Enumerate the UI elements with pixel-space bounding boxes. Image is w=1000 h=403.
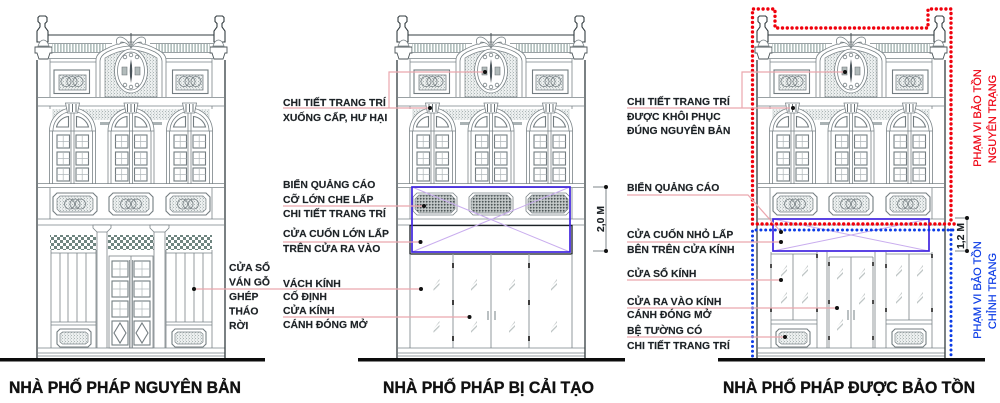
small roller shutter bbox=[773, 219, 929, 251]
ground line bbox=[358, 358, 625, 362]
sign and shutter extent bbox=[412, 187, 570, 252]
label: fixed glass: VÁCH KÍNH bbox=[283, 277, 341, 290]
label: glass door: CÁNH ĐÓNG MỞ bbox=[283, 318, 368, 331]
label: decoration restored: CHI TIẾT TRANG TRÍ bbox=[627, 95, 731, 108]
label: large shutter: CỬA CUỐN LỚN LẤP bbox=[283, 226, 389, 240]
panel: preserved townhouse bbox=[627, 9, 999, 397]
base and walls bbox=[757, 225, 945, 359]
facade upper floors bbox=[755, 16, 947, 225]
dimension 2,0 M bbox=[593, 185, 608, 253]
label: red scope: PHẠM VI BẢO TỒN bbox=[971, 69, 984, 167]
ground line bbox=[0, 358, 265, 362]
label: large shutter: TRÊN CỬA RA VÀO bbox=[283, 242, 380, 255]
label: sign: BIỂN QUẢNG CÁO bbox=[627, 181, 719, 194]
label: decoration restored: ĐÚNG NGUYÊN BẢN bbox=[627, 124, 730, 137]
lower plaques bbox=[57, 329, 206, 347]
label: wooden shutter: THÁO bbox=[229, 304, 258, 318]
ground line bbox=[718, 358, 985, 362]
label: decoration damaged: XUỐNG CẤP, HƯ HẠI bbox=[283, 110, 387, 124]
label: big sign: CHI TIẾT TRANG TRÍ bbox=[283, 207, 387, 220]
lower plaques bbox=[776, 329, 926, 347]
label: wooden shutter: GHÉP bbox=[229, 290, 259, 303]
facade upper floors bbox=[35, 16, 227, 225]
base and walls bbox=[37, 225, 225, 359]
dimension 1,2 M: 1,2 M bbox=[956, 223, 967, 249]
panel: original townhouse bbox=[0, 16, 283, 397]
label: wooden shutter: RỜI bbox=[229, 319, 248, 332]
label: big sign bbox=[283, 178, 387, 220]
title: NHÀ PHỐ PHÁP NGUYÊN BẢN bbox=[9, 377, 241, 397]
title: NHÀ PHỐ PHÁP ĐƯỢC BẢO TỒN bbox=[723, 377, 975, 397]
covered plaques bbox=[413, 193, 570, 215]
label: decoration damaged bbox=[283, 96, 387, 124]
dimension 2,0 M: 2,0 M bbox=[596, 206, 607, 232]
panel: altered townhouse bbox=[283, 16, 625, 397]
red conservation boundary bbox=[752, 9, 955, 224]
blue conservation boundary bbox=[752, 230, 955, 356]
label: small shutter: BÊN TRÊN CỬA KÍNH bbox=[627, 243, 735, 256]
label: wall base bbox=[627, 324, 731, 352]
ground floor with shutters and door bbox=[50, 225, 212, 348]
label: big sign: BIỂN QUẢNG CÁO bbox=[283, 178, 375, 191]
label: blue scope: CHỈNH TRANG bbox=[986, 253, 999, 329]
title: NHÀ PHỐ PHÁP BỊ CẢI TẠO bbox=[383, 377, 594, 397]
label: wall base: BỆ TƯỜNG CÓ bbox=[627, 324, 702, 337]
label: blue scope bbox=[971, 241, 999, 339]
label: wooden shutter: VÁN GỖ bbox=[229, 276, 270, 288]
label: fixed glass: CỐ ĐỊNH bbox=[283, 289, 327, 303]
label: fixed glass bbox=[283, 277, 341, 303]
label: glass door bbox=[627, 295, 721, 321]
label: large shutter bbox=[283, 226, 389, 255]
label: wooden shutter: CỬA SỔ bbox=[229, 261, 270, 274]
label: blue scope: PHẠM VI BẢO TỒN bbox=[971, 241, 984, 339]
label: wall base: CHI TIẾT TRANG TRÍ bbox=[627, 339, 731, 352]
label: wooden shutter bbox=[229, 261, 270, 332]
label: red scope: NGUYÊN TRẠNG bbox=[986, 75, 999, 163]
facade upper floors bbox=[395, 16, 587, 225]
dimension 1,2 M bbox=[955, 216, 969, 253]
label: big sign: CỠ LỚN CHE LẤP bbox=[283, 193, 374, 206]
base and walls bbox=[397, 225, 585, 359]
large roller shutter bbox=[410, 226, 572, 254]
label: red scope bbox=[971, 69, 999, 167]
label: decoration damaged: CHI TIẾT TRANG TRÍ bbox=[283, 96, 387, 109]
label: glass door bbox=[283, 304, 368, 331]
decorative plaques bbox=[53, 193, 210, 215]
label: glass door: CÁNH ĐÓNG MỞ bbox=[627, 308, 712, 321]
glass storefront bbox=[410, 254, 572, 348]
label: small shutter bbox=[627, 227, 735, 256]
glass windows and door bbox=[771, 252, 932, 348]
label: decoration restored: ĐƯỢC KHÔI PHỤC bbox=[627, 110, 721, 123]
label: glass door: CỬA KÍNH bbox=[283, 304, 335, 317]
leaders bbox=[627, 70, 847, 339]
label: glass window: CỬA SỔ KÍNH bbox=[627, 267, 696, 280]
label: decoration restored bbox=[627, 95, 731, 137]
leaders bbox=[283, 70, 487, 319]
label: small shutter: CỬA CUỐN NHỎ LẤP bbox=[627, 227, 733, 241]
label: glass door: CỬA RA VÀO KÍNH bbox=[627, 295, 721, 308]
leader: wooden shutter bbox=[192, 287, 283, 291]
plaques bbox=[773, 193, 930, 215]
